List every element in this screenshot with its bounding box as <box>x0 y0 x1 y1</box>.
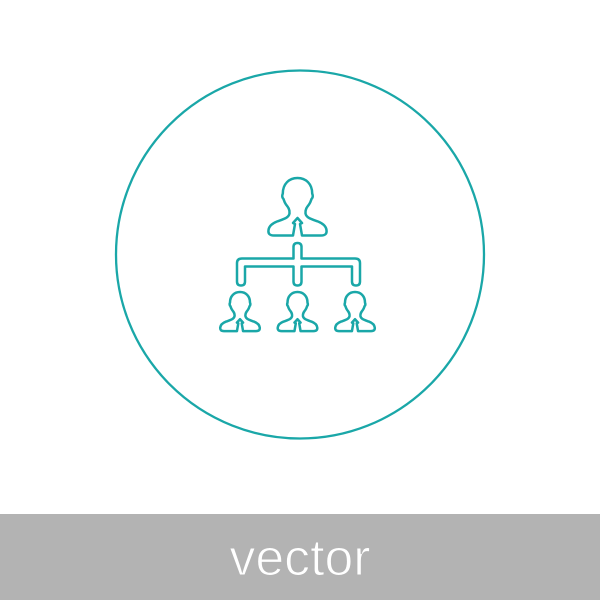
footer label: vector <box>230 529 371 586</box>
icon: left person <box>220 292 260 331</box>
icon: right person <box>335 292 375 331</box>
icon circle outline <box>116 70 484 438</box>
footer band <box>0 514 600 600</box>
icon: middle person <box>278 292 317 331</box>
icon: top person <box>268 178 327 236</box>
icon: hierarchy chart <box>220 178 375 331</box>
icon: connector tree <box>237 243 360 286</box>
